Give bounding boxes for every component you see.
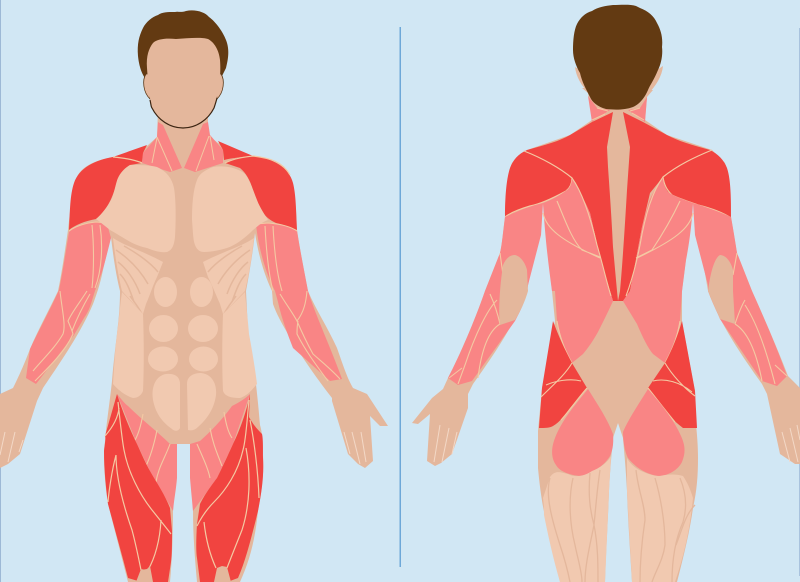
right pectoral [192, 166, 268, 252]
left neck muscle [142, 122, 182, 172]
right lower back [648, 321, 697, 428]
right latissimus [623, 177, 693, 363]
neck muscles [142, 122, 223, 172]
right back arm muscles [693, 203, 787, 386]
right hamstring [627, 458, 695, 582]
left pectoral [96, 165, 176, 252]
right oblique [222, 292, 257, 398]
back hair [573, 5, 662, 110]
back body silhouette [412, 88, 800, 582]
front ears [144, 74, 223, 99]
shoulder seams [113, 156, 290, 175]
front hair [138, 10, 228, 80]
right inner thigh [190, 394, 250, 511]
left back arm skin patch [499, 255, 528, 325]
left trapezius [113, 145, 147, 162]
right gluteus [623, 389, 685, 476]
right trapezius [218, 141, 253, 160]
left arm muscles [26, 222, 111, 384]
back neck muscles [588, 96, 647, 122]
figure: back view [412, 5, 800, 582]
finger gaps [0, 432, 366, 464]
jaw outline [150, 98, 217, 128]
left ribs [113, 238, 163, 314]
right neck muscle [184, 122, 223, 172]
right deltoid [225, 156, 297, 230]
front body silhouette [0, 110, 388, 582]
right back deltoid and trapezius [618, 112, 731, 301]
left back arm muscles [448, 203, 543, 385]
right quadriceps [196, 394, 263, 582]
back ears [575, 66, 663, 94]
right back arm skin patch [708, 255, 735, 324]
center divider line [400, 27, 401, 567]
left thigh lines [135, 414, 170, 482]
figure: front view [0, 10, 388, 582]
left back deltoid and trapezius [505, 112, 618, 301]
front face [147, 38, 220, 128]
right arm muscles [256, 223, 342, 381]
left oblique [113, 292, 144, 398]
left gluteus [552, 389, 613, 476]
left deltoid [69, 157, 142, 230]
bottom knee skin [136, 566, 231, 582]
abdominal muscles [148, 277, 218, 431]
right thigh lines [197, 412, 232, 478]
back deltoid seams [505, 150, 731, 218]
left quadriceps [104, 394, 172, 582]
left inner thigh [117, 394, 177, 511]
left latissimus [543, 178, 613, 363]
left lower back [539, 321, 587, 428]
right ribs [203, 238, 254, 314]
left hamstring [543, 456, 611, 582]
back finger gaps [434, 425, 800, 462]
lower back seams [541, 363, 695, 422]
